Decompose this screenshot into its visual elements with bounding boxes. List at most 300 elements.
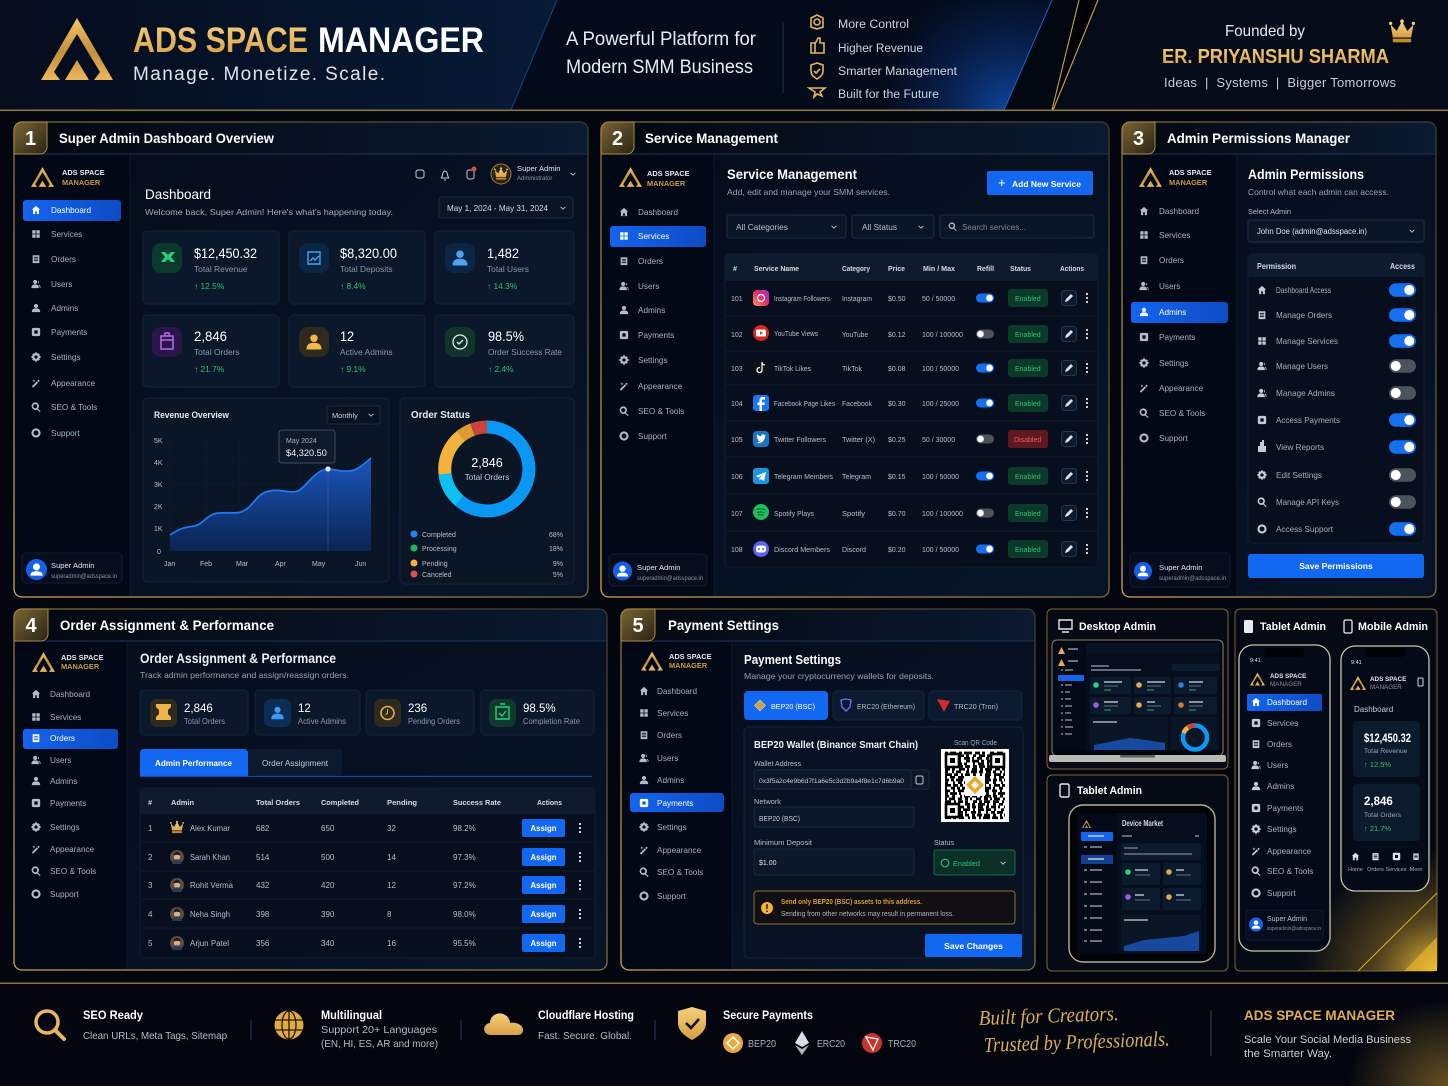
badge 2	[601, 122, 634, 154]
chart: revenue overview: 1K	[154, 526, 163, 533]
top bar	[416, 164, 575, 184]
sidebar: SEO & Tools	[657, 868, 703, 877]
chart: revenue overview: Monthly	[332, 411, 358, 420]
sidebar: ADS SPACE	[61, 653, 104, 662]
chart: revenue overview: Apr	[275, 561, 287, 568]
chart: revenue overview: 5K	[154, 438, 163, 445]
sidebar: Support	[51, 429, 80, 438]
sidebar: Payments	[51, 328, 87, 337]
phone mockup with side menu: Settings	[1267, 825, 1297, 834]
chart: order status donut: Processing	[422, 546, 457, 553]
section heading: Control what each admin can access.	[1248, 187, 1389, 197]
section heading: Add, edit and manage your SMM services.	[727, 187, 890, 197]
stat card: total revenue	[143, 231, 279, 304]
row arjun patel: 340	[321, 939, 335, 948]
feature list: Built for the Future	[838, 87, 939, 101]
row 108 discord	[731, 540, 1088, 558]
status select: Enabled	[953, 861, 980, 868]
services table	[725, 254, 1098, 567]
panel 5: payment settings	[621, 609, 1035, 970]
network field: BEP20 (BSC)	[759, 816, 800, 823]
row sarah khan: 2	[148, 853, 153, 862]
coin: bep20	[723, 1033, 776, 1053]
heading: Desktop Admin	[1079, 621, 1156, 633]
row alex kumar: 98.2%	[453, 824, 476, 833]
badge 1	[14, 122, 47, 154]
sidebar: Services	[50, 713, 81, 722]
stat card: total deposits: ↑ 8.4%	[340, 281, 366, 291]
row neha singh: 4	[148, 910, 153, 919]
row neha singh: Assign	[530, 910, 557, 919]
select admin: Select Admin	[1248, 209, 1291, 216]
minimum deposit: $1.00	[759, 860, 777, 867]
page heading: Dashboard	[145, 186, 211, 202]
phone mockup with side menu: Dashboard	[1267, 698, 1308, 707]
chart: revenue overview: 3K	[154, 482, 163, 489]
sidebar: ADS SPACE	[647, 169, 690, 178]
row arjun patel: 95.5%	[453, 939, 476, 948]
services table: Category	[842, 264, 870, 273]
card: revenue: $12,450.32	[1364, 733, 1411, 745]
stat card: total revenue: $12,450.32	[194, 245, 257, 261]
row 104 facebook: Facebook	[842, 401, 872, 408]
brand sign-off	[1244, 1007, 1411, 1060]
phone mockup with side menu: Users	[1267, 761, 1288, 770]
section heading: Manage your cryptocurrency wallets for deposits.	[744, 671, 934, 681]
row 106 telegram: 106	[731, 474, 743, 481]
row 106 telegram: Enabled	[1015, 474, 1041, 481]
stat card: order success rate	[435, 315, 574, 387]
row 104 facebook: 100 / 25000	[922, 401, 959, 408]
sidebar: Admins	[638, 306, 665, 315]
row arjun patel: 5	[148, 939, 153, 948]
stat card: total orders: Total Orders	[194, 347, 240, 357]
sidebar: Users	[1159, 282, 1180, 291]
network tabs: TRC20 (Tron)	[954, 702, 998, 711]
row 102 youtube: $0.12	[888, 332, 906, 339]
bottom nav	[1348, 853, 1422, 873]
chart: order status donut: 9%	[553, 561, 563, 568]
row neha singh: 390	[321, 910, 335, 919]
row 107 spotify: Spotify	[842, 511, 866, 518]
permissions table: Access Payments	[1276, 416, 1340, 425]
chart: order status donut: Canceled	[422, 572, 452, 579]
network field: Network	[754, 799, 782, 806]
sidebar: Settings	[657, 823, 687, 832]
stat: total orders: Total Orders	[184, 716, 225, 726]
wallet address: Wallet Address	[754, 761, 801, 768]
permissions table: Permission	[1257, 262, 1296, 271]
section heading: Service Management	[727, 166, 857, 182]
corner gold glow	[1300, 850, 1437, 971]
row 101 instagram: Instagram Followers	[774, 296, 830, 303]
button: save changes	[925, 934, 1022, 957]
title: ADS SPACE	[133, 21, 308, 60]
founder block	[1162, 19, 1415, 90]
coin: bep20: BEP20	[748, 1039, 776, 1050]
header banner	[0, 0, 1448, 111]
phone mockup with dashboard cards: Dashboard	[1354, 705, 1393, 714]
feature: multilingual	[274, 1008, 438, 1050]
sidebar	[15, 642, 127, 969]
sidebar: Services	[657, 709, 688, 718]
panel 3: admin permissions manager	[1122, 122, 1436, 597]
row rohit verma	[148, 876, 581, 894]
row neha singh: 8	[387, 910, 392, 919]
sidebar	[622, 642, 732, 969]
row 106 telegram	[731, 467, 1088, 485]
row neha singh: 398	[256, 910, 270, 919]
chart: order status donut: 68%	[549, 532, 563, 539]
phone mockup with side menu: 9:41	[1250, 658, 1261, 664]
feature: seo ready: SEO Ready	[83, 1008, 143, 1022]
card: orders: ↑ 21.7%	[1364, 824, 1391, 833]
chart: revenue overview: 2K	[154, 504, 163, 511]
badge 3: 3	[1133, 128, 1144, 150]
warning notice: Send only BEP20 (BSC) assets to this address.	[781, 899, 922, 906]
section heading: Payment Settings	[744, 653, 841, 667]
row 107 spotify: Spotify Plays	[774, 511, 814, 518]
wallet card: Scan QR Code	[954, 740, 997, 747]
badge 4	[14, 609, 48, 641]
feature list: Higher Revenue	[838, 41, 923, 55]
founder block: Founded by	[1225, 23, 1305, 40]
sidebar: MANAGER	[1169, 178, 1208, 187]
card: revenue: Total Revenue	[1364, 748, 1408, 755]
feature: cloudflare hosting	[484, 1008, 634, 1042]
row neha singh	[148, 905, 581, 923]
sidebar: Orders	[1159, 256, 1184, 265]
row 101 instagram: $0.50	[888, 296, 906, 303]
row 108 discord: 108	[731, 547, 743, 554]
tooltip: $4,320.50	[286, 448, 327, 458]
chart: revenue overview: 4K	[154, 460, 163, 467]
platform statement: A Powerful Platform for	[566, 29, 757, 50]
coin: erc20	[795, 1031, 845, 1055]
row 107 spotify: $0.70	[888, 511, 906, 518]
row 108 discord: Discord	[842, 547, 866, 554]
row 102 youtube	[731, 325, 1088, 343]
stat card: order success rate: ↑ 2.4%	[488, 364, 514, 374]
feature: seo ready: Clean URLs, Meta Tags, Sitemap	[83, 1031, 227, 1042]
row 106 telegram: Telegram	[842, 474, 871, 481]
row 104 facebook: Enabled	[1015, 401, 1041, 408]
status select: Status	[934, 840, 954, 847]
row 107 spotify: Enabled	[1015, 511, 1041, 518]
warning notice	[754, 891, 1015, 924]
chart: order status donut: 5%	[553, 572, 563, 579]
panel: desktop admin	[1047, 609, 1228, 769]
services table: Price	[888, 264, 905, 273]
logo: gold A mark	[41, 18, 113, 80]
stat card: total users: 1,482	[487, 245, 519, 261]
tabs	[140, 749, 592, 776]
row 102 youtube: Enabled	[1015, 332, 1041, 339]
feature: cloudflare hosting: Fast. Secure. Global.	[538, 1031, 632, 1042]
row 103 tiktok	[731, 359, 1088, 377]
row alex kumar: Alex Kumar	[190, 824, 230, 833]
admin performance table: Admin	[171, 798, 194, 807]
chart: revenue overview: Jun	[355, 561, 366, 568]
row alex kumar: 650	[321, 824, 335, 833]
section heading	[727, 166, 890, 197]
sidebar: ADS SPACE	[62, 168, 105, 177]
brand sign-off: Scale Your Social Media Business	[1244, 1034, 1411, 1046]
chart: revenue overview: Feb	[200, 561, 212, 568]
stat: active admins	[255, 690, 360, 735]
card: orders: Total Orders	[1364, 812, 1402, 819]
script slogan	[978, 1001, 1170, 1057]
row 107 spotify: 100 / 100000	[922, 511, 963, 518]
network field	[754, 799, 914, 827]
chart: revenue overview: Revenue Overview	[154, 410, 230, 420]
permissions table: Access Support	[1276, 525, 1334, 534]
permissions table: View Reports	[1276, 443, 1324, 452]
row alex kumar	[148, 819, 581, 837]
script slogan: Built for Creators.	[978, 1001, 1119, 1030]
phone mockup with dashboard cards: ADS SPACE	[1370, 676, 1406, 683]
bottom nav: Home	[1348, 867, 1363, 873]
stat: total orders: 2,846	[184, 703, 213, 715]
sidebar: Payments	[50, 799, 86, 808]
row 106 telegram: 100 / 50000	[922, 474, 959, 481]
admin performance table: Completed	[321, 798, 359, 807]
row rohit verma: 12	[387, 881, 396, 890]
row sarah khan: Sarah Khan	[190, 853, 230, 862]
sidebar: Admins	[1159, 308, 1186, 317]
row arjun patel: Arjun Patel	[190, 939, 229, 948]
sidebar: Users	[657, 754, 678, 763]
row 102 youtube: YouTube	[842, 332, 868, 339]
sidebar: Super Admin	[51, 561, 94, 570]
stat: pending orders	[366, 690, 474, 735]
brand sign-off: the Smarter Way.	[1244, 1048, 1332, 1060]
stat: pending orders: Pending Orders	[408, 716, 460, 726]
row rohit verma: 3	[148, 881, 153, 890]
badge 2: 2	[612, 128, 623, 150]
services table: #	[733, 264, 737, 273]
title: MANAGER	[318, 21, 484, 60]
sidebar: MANAGER	[62, 178, 101, 187]
coin: trc20: TRC20	[888, 1039, 916, 1050]
row neha singh: Neha Singh	[190, 910, 230, 919]
row alex kumar: 1	[148, 824, 153, 833]
sidebar: Support	[657, 892, 686, 901]
row 105 twitter: $0.25	[888, 437, 906, 444]
date picker	[439, 197, 573, 218]
stat card: total orders: 2,846	[194, 328, 227, 344]
sidebar: Dashboard	[638, 208, 679, 217]
admin performance table	[140, 788, 595, 958]
sidebar: Orders	[638, 257, 663, 266]
row 103 tiktok: 100 / 50000	[922, 366, 959, 373]
filters: All Categories	[736, 223, 788, 232]
section heading: Order Assignment & Performance	[140, 651, 336, 666]
sidebar: Users	[50, 756, 71, 765]
sidebar: Admins	[51, 304, 78, 313]
stat card: total revenue: Total Revenue	[194, 264, 248, 274]
row 104 facebook: $0.30	[888, 401, 906, 408]
stat: completion rate	[481, 690, 594, 735]
admin performance table: Success Rate	[453, 798, 501, 807]
sidebar: ADS SPACE	[1169, 168, 1212, 177]
phone mockup with side menu: Support	[1267, 889, 1296, 898]
stat card: total deposits: Total Deposits	[340, 264, 393, 274]
row 102 youtube: 102	[731, 332, 743, 339]
phone mockup with side menu: MANAGER	[1270, 681, 1302, 688]
network tabs	[744, 691, 1022, 720]
stat: completion rate: 98.5%	[523, 703, 556, 715]
sidebar: MANAGER	[669, 661, 708, 670]
row alex kumar: 682	[256, 824, 270, 833]
row 104 facebook	[731, 394, 1088, 412]
panel 1: super admin dashboard	[14, 122, 588, 597]
chart: order status donut	[400, 398, 574, 584]
panel: tablet admin	[1047, 775, 1228, 971]
panel 3 title: Admin Permissions Manager	[1167, 130, 1351, 146]
stat card: total users	[435, 231, 574, 304]
row neha singh: 98.0%	[453, 910, 476, 919]
filters: Search services...	[962, 223, 1026, 232]
feature: multilingual: Support 20+ Languages	[321, 1025, 437, 1036]
button: add new service: +	[998, 175, 1006, 190]
section heading: Track admin performance and assign/reassign orders.	[140, 670, 349, 680]
services table: Status	[1010, 264, 1031, 273]
sidebar: superadmin@adsspace.in	[637, 576, 703, 582]
sidebar: Dashboard	[51, 206, 92, 215]
top bar: Administrator	[517, 176, 552, 182]
row 103 tiktok: TikTok	[842, 366, 862, 373]
feature: cloudflare hosting: Cloudflare Hosting	[538, 1008, 634, 1022]
row sarah khan: 514	[256, 853, 270, 862]
stat card: total users: ↑ 14.3%	[487, 281, 518, 291]
row 103 tiktok: TikTok Likes	[774, 366, 811, 373]
phone mockup with dashboard cards	[1341, 646, 1429, 891]
bottom nav: Orders	[1367, 867, 1384, 873]
row 108 discord: Enabled	[1015, 547, 1041, 554]
feature list: More Control	[838, 17, 909, 31]
phone mockup with side menu: Services	[1267, 719, 1298, 728]
sidebar: Appearance	[657, 846, 702, 855]
sidebar: Orders	[50, 734, 75, 743]
row 108 discord: Discord Members	[774, 547, 830, 554]
row sarah khan: 97.3%	[453, 853, 476, 862]
row sarah khan	[148, 848, 581, 866]
chart: order status donut: 18%	[549, 546, 563, 553]
tooltip: May 2024	[286, 438, 317, 445]
row 105 twitter: Twitter (X)	[842, 437, 875, 444]
qr code	[941, 749, 1009, 822]
row rohit verma: Rohit Verma	[190, 881, 234, 890]
network tabs: ERC20 (Ethereum)	[857, 702, 915, 711]
card: orders: 2,846	[1364, 796, 1393, 808]
row rohit verma: 97.2%	[453, 881, 476, 890]
bottom nav: More	[1410, 867, 1422, 873]
heading: Tablet Admin	[1077, 785, 1142, 797]
row arjun patel: 356	[256, 939, 270, 948]
sidebar: Services	[638, 232, 669, 241]
row 101 instagram	[731, 289, 1088, 307]
feature: multilingual: (EN, HI, ES, AR and more)	[321, 1039, 438, 1050]
panel 5 title: Payment Settings	[668, 617, 779, 633]
sidebar: ADS SPACE	[669, 652, 712, 661]
sidebar: Super Admin	[637, 563, 680, 572]
badge 4: 4	[25, 615, 37, 637]
row 101 instagram: 50 / 50000	[922, 296, 955, 303]
row alex kumar: 32	[387, 824, 396, 833]
button: save changes: Save Changes	[944, 941, 1003, 951]
tablet mockup	[1069, 805, 1215, 962]
sidebar: SEO & Tools	[51, 403, 97, 412]
coin: trc20	[862, 1033, 916, 1053]
sidebar: Appearance	[638, 382, 683, 391]
card: revenue	[1353, 721, 1420, 777]
laptop mockup	[1049, 640, 1226, 762]
icon: monitor	[1059, 620, 1072, 632]
sidebar: SEO & Tools	[1159, 409, 1205, 418]
admin performance table: Pending	[387, 798, 417, 807]
row arjun patel: 16	[387, 939, 396, 948]
label: tablet admin: Tablet Admin	[1260, 621, 1326, 633]
minimum deposit: Minimum Deposit	[754, 840, 812, 847]
phone mockup with side menu: Admins	[1267, 782, 1294, 791]
row 104 facebook: Facebook Page Likes	[774, 401, 835, 408]
feature list: Smarter Management	[838, 64, 958, 78]
chart: revenue overview: May	[312, 561, 326, 568]
badge 5: 5	[632, 615, 644, 637]
section heading	[1248, 166, 1389, 197]
row 108 discord: 100 / 50000	[922, 547, 959, 554]
admin performance table: #	[148, 798, 152, 807]
date picker: May 1, 2024 - May 31, 2024	[447, 204, 549, 213]
row 104 facebook: 104	[731, 401, 743, 408]
sidebar	[602, 155, 714, 596]
chart: order status donut: 2,846	[471, 456, 503, 470]
row rohit verma: 420	[321, 881, 335, 890]
feature: secure payments: Secure Payments	[723, 1008, 813, 1022]
tooltip	[279, 430, 335, 463]
stat card: total revenue: ↑ 12.5%	[194, 281, 225, 291]
page heading: Welcome back, Super Admin! Here's what's happening today.	[145, 207, 393, 217]
sidebar: Appearance	[1159, 384, 1204, 393]
sidebar: Users	[638, 282, 659, 291]
brand sign-off: ADS SPACE MANAGER	[1244, 1007, 1395, 1023]
sidebar: SEO & Tools	[638, 407, 684, 416]
row 106 telegram: Telegram Members	[774, 474, 833, 481]
badge 3	[1122, 122, 1155, 154]
stat card: active admins: Active Admins	[340, 347, 393, 357]
services table: Actions	[1060, 264, 1084, 273]
badge 5	[621, 609, 655, 641]
row 101 instagram: 101	[731, 296, 743, 303]
feature: secure payments	[678, 1007, 916, 1055]
sidebar: Payments	[638, 331, 674, 340]
badge 1: 1	[25, 128, 36, 150]
stat: total orders	[140, 690, 248, 735]
sidebar: Admins	[657, 776, 684, 785]
sidebar: Dashboard	[50, 690, 91, 699]
wallet address: 0x3f5a2c4e9b6d7f1a6e5c3d2b9a4f8e1c7d6b9a0	[759, 778, 904, 785]
sidebar: Dashboard	[657, 687, 698, 696]
row 105 twitter	[731, 430, 1088, 448]
permissions table: Access	[1390, 262, 1415, 271]
sidebar: Payments	[657, 799, 693, 808]
stat card: order success rate: Order Success Rate	[488, 347, 562, 357]
platform statement	[566, 29, 757, 78]
wallet card	[744, 727, 1023, 958]
row arjun patel	[148, 934, 581, 952]
phone mockup with dashboard cards: MANAGER	[1370, 684, 1402, 691]
